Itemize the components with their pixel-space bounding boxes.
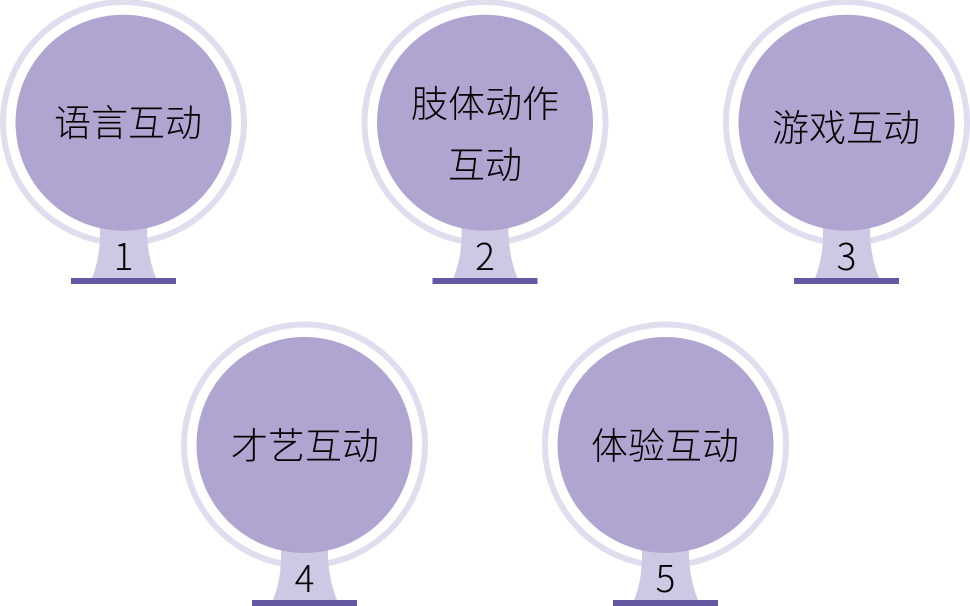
item 3: 游戏互动 xyxy=(726,2,967,284)
item 4: 才艺互动: 才艺互动 xyxy=(231,426,379,467)
item 5: 体验互动 xyxy=(545,324,786,606)
item 5: 体验互动: 5 xyxy=(656,549,675,603)
item 1: 语言互动: 语言互动 xyxy=(54,103,202,144)
item 2: 肢体动作互动: 肢体动作 xyxy=(411,84,559,125)
item 3: 游戏互动: 游戏互动 xyxy=(772,108,920,149)
item 1: 语言互动: 1 xyxy=(114,227,133,281)
item 4: 才艺互动 xyxy=(184,324,425,606)
item 2: 肢体动作互动 xyxy=(364,2,606,284)
item 4: 才艺互动: 4 xyxy=(295,549,314,603)
item 2: 肢体动作互动: 2 xyxy=(475,227,495,281)
item 5: 体验互动: 体验互动 xyxy=(591,426,739,467)
item 3: 游戏互动: 3 xyxy=(837,227,856,281)
item 1: 语言互动 xyxy=(3,2,244,284)
item 2: 肢体动作互动: 互动 xyxy=(448,145,522,186)
